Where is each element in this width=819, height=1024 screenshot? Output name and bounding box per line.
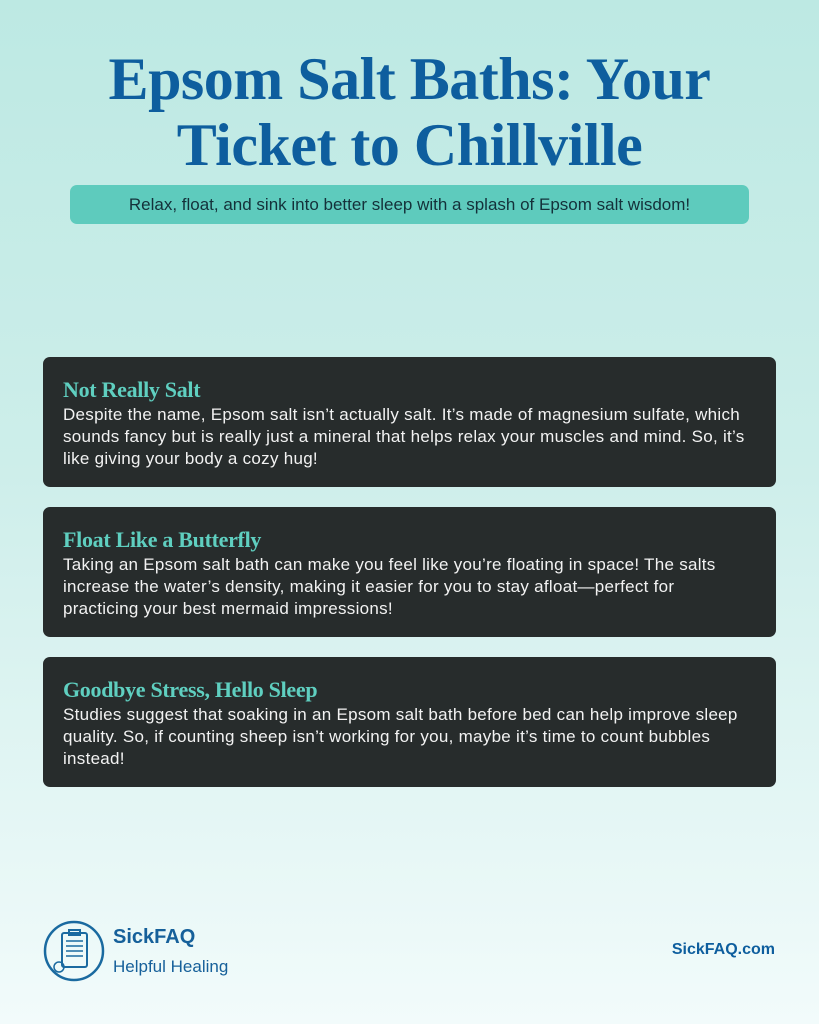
card: goodbye stress [43,657,776,787]
card: goodbye stress: instead! [63,749,125,768]
card: float like a butterfly: Taking an Epsom salt bath can make you feel like you’re floating in space! The salts [63,555,716,574]
tagline: Helpful Healing [113,957,228,976]
logo [44,920,228,982]
card: float like a butterfly [43,507,776,637]
card: not really salt [43,357,776,487]
subtitle pill: Relax, float, and sink into better sleep with a splash of Epsom salt wisdom! [129,195,690,214]
title: Epsom Salt Baths: Your [109,46,710,112]
card: not really salt: Not Really Salt [63,377,200,402]
card: goodbye stress: Goodbye Stress, Hello Sleep [63,677,317,702]
card: float like a butterfly: practicing your best mermaid impressions! [63,599,393,618]
url: SickFAQ.com [672,941,775,958]
card: float like a butterfly: increase the water’s density, making it easier for you to stay afloat—perfect for [63,577,674,596]
card: not really salt: like giving your body a cozy hug! [63,449,318,468]
card: float like a butterfly: Float Like a Butterfly [63,527,261,552]
card: not really salt: Despite the name, Epsom salt isn’t actually salt. It’s made of magnesium sulfate, which [63,405,740,424]
title: Ticket to Chillville [177,112,642,178]
brand name: SickFAQ [113,926,195,948]
title [109,46,710,178]
icon: clipboard [44,920,104,982]
subtitle pill [70,185,749,224]
card: goodbye stress: quality. So, if counting sheep isn’t working for you, maybe it’s time to count bubbles [63,727,710,746]
card: goodbye stress: Studies suggest that soaking in an Epsom salt bath before bed can help improve sleep [63,705,738,724]
card: not really salt: sounds fancy but is really just a mineral that helps relax your muscles and mind. So, it’s [63,427,745,446]
